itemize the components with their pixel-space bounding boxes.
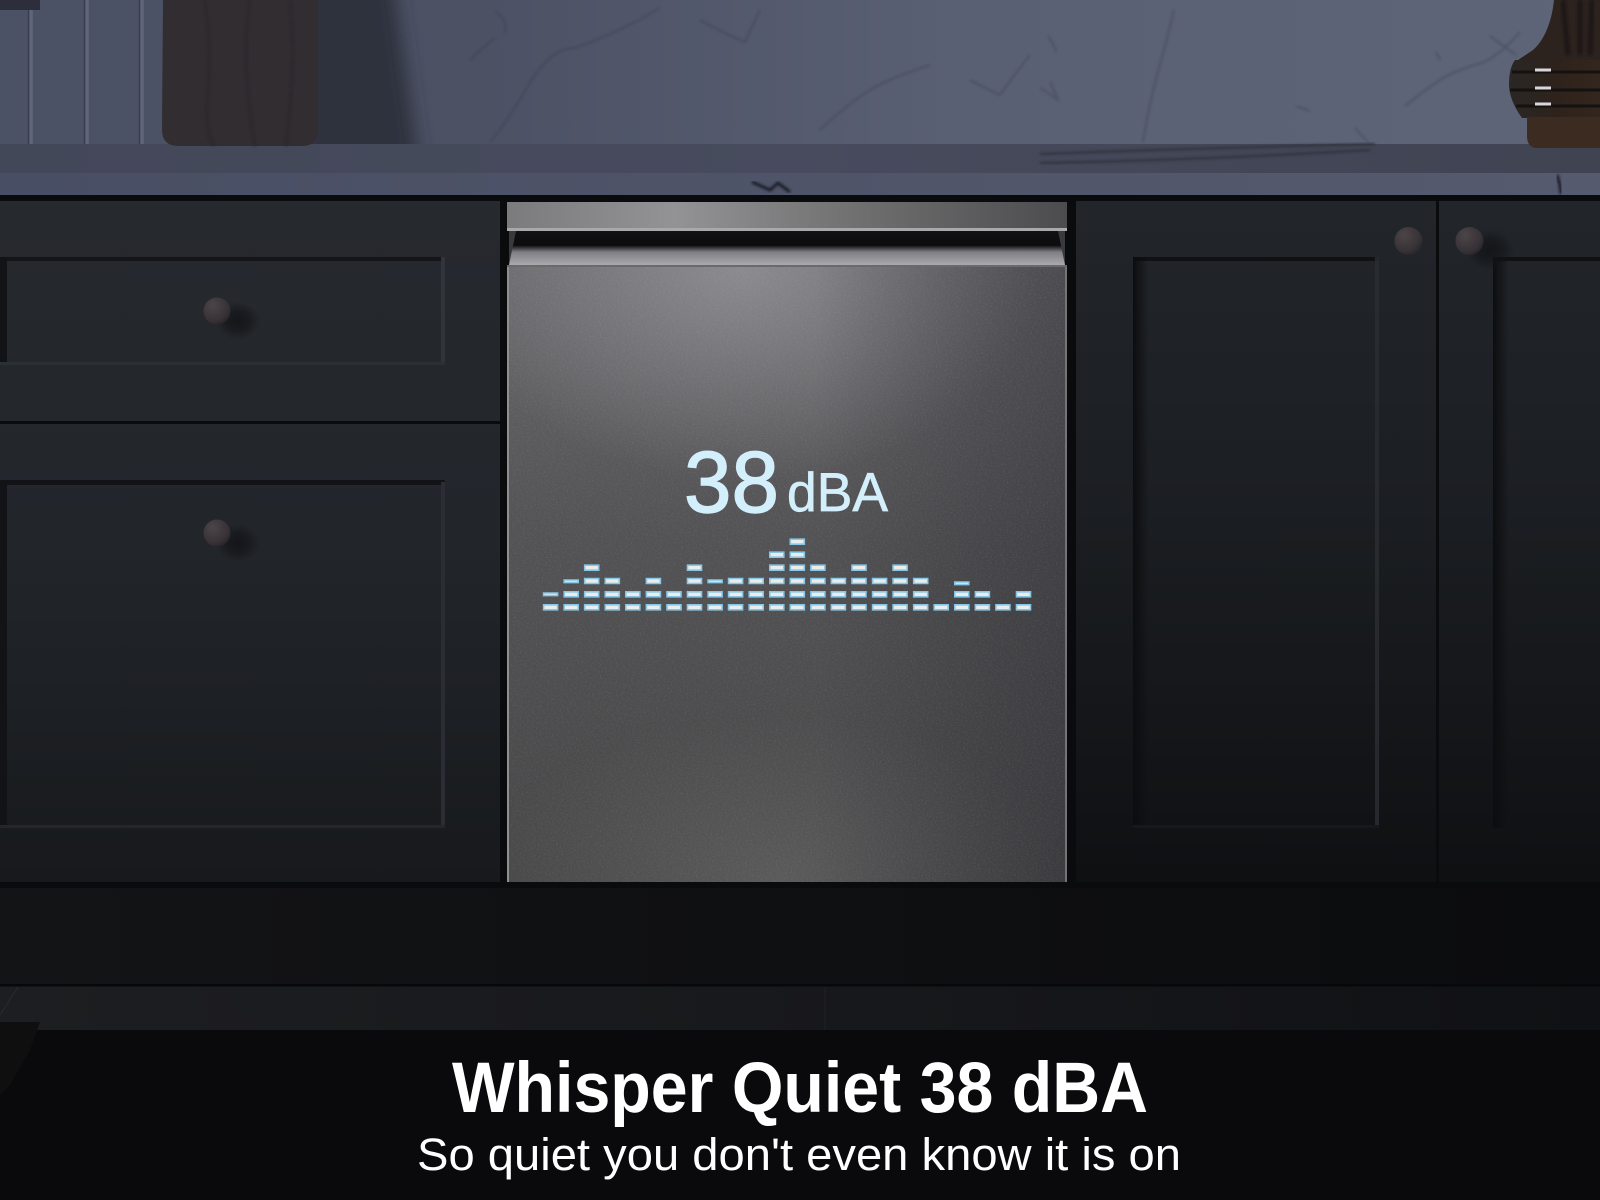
- counter shadow line: [0, 195, 1600, 201]
- text: 38: 38: [684, 434, 779, 531]
- control strip: [507, 202, 1067, 228]
- cutting board: [162, 0, 318, 146]
- door knob: [1466, 230, 1514, 270]
- dishwasher: [507, 202, 1067, 882]
- subheading: So quiet you don't even know it is on: [417, 1129, 1181, 1180]
- noise level readout: [684, 434, 888, 531]
- equalizer graphic: [544, 539, 1030, 610]
- left door: [1076, 201, 1436, 882]
- floor vent: [0, 1022, 40, 1095]
- background wall: marble backsplash: [0, 0, 1600, 170]
- upper drawer: [0, 201, 500, 421]
- counter veins: [1040, 144, 1375, 163]
- wall shadow behind cutting board: [300, 0, 420, 170]
- stainless door: [507, 267, 1067, 882]
- counter front edge: [0, 173, 1600, 195]
- vase: [1509, 0, 1600, 148]
- drawer knob: [204, 520, 260, 562]
- right door: [1439, 201, 1600, 882]
- marble veins: [470, 8, 1520, 142]
- wall panel mouldings: [0, 0, 142, 144]
- counter top surface: [0, 144, 1600, 173]
- door knob: [1394, 227, 1422, 255]
- heading: Whisper Quiet 38 dBA: [452, 1049, 1148, 1128]
- lower drawer: [0, 424, 500, 882]
- drawer knob: [204, 298, 260, 340]
- right cabinets: [1076, 201, 1600, 882]
- cabinet backdrop gaps: [0, 200, 1600, 885]
- left cabinets: [0, 201, 500, 882]
- handle recess: [509, 231, 1065, 265]
- caption band: [0, 1022, 1600, 1200]
- text: dBA: dBA: [787, 461, 888, 523]
- floor: [0, 984, 1600, 1030]
- toe kick: [0, 882, 1600, 985]
- countertop: [0, 144, 1600, 201]
